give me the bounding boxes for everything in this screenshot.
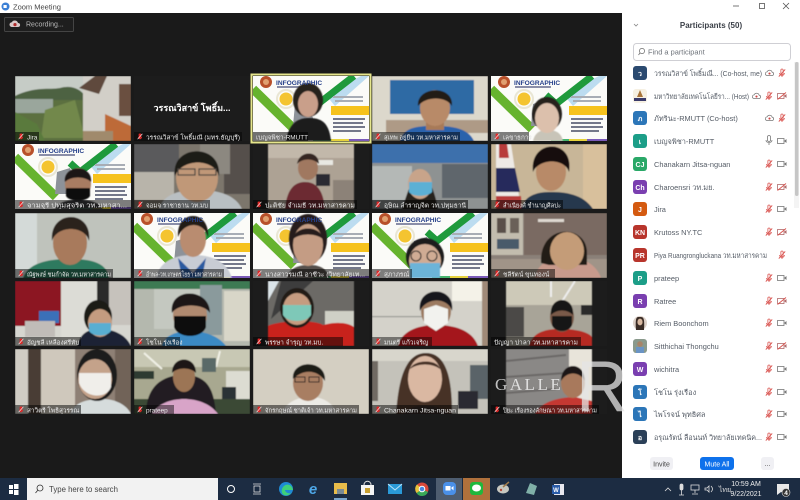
icon: paint	[497, 482, 509, 494]
participant row: Piya Ruangrongluckana วท.มหาสารคาม	[654, 251, 767, 260]
panel heading: Participants (50)	[680, 21, 742, 30]
participant row	[633, 180, 786, 194]
participant row: R	[637, 299, 643, 306]
participant row: Riem Boonchom	[654, 319, 709, 328]
name tag: โชโน รุ่งเรือง	[146, 338, 182, 346]
participant row: มหาวิทยาลัยเทคโนโลยีรา... (Host)	[654, 92, 749, 101]
slide heading: INFOGRAPHIC	[514, 80, 560, 87]
name tag: สาวิตรี โพธิสุวรรณ	[27, 406, 79, 414]
name tag: วรรณวิสาข์ โพธิ์มณี (มทร.ธัญบุรี)	[146, 132, 240, 141]
name tag: มนตรี แก้วเจริญ	[384, 338, 429, 346]
video tile: man in red, pillarboxed office	[491, 281, 607, 346]
participant row: ไ	[637, 410, 642, 419]
icon: chrome	[415, 482, 428, 496]
name tag: ปิยะ เรืองรองลักษณา วท.มหาสารคาม	[502, 406, 597, 414]
participant row	[633, 134, 786, 148]
participant row: P	[638, 276, 643, 283]
participant row: เ	[639, 139, 642, 146]
participant row: Sitthichai Thongchu	[654, 342, 719, 351]
name tag: Jira	[27, 134, 38, 141]
clock: 9/22/2021	[730, 491, 762, 498]
video tile: woman with white mask	[15, 349, 131, 414]
participant row	[633, 339, 786, 353]
participant row: โชโน รุ่งเรือง	[654, 388, 697, 397]
name tag: สำเนียงศ์ ชำนาญศิลปะ	[503, 201, 561, 209]
keyboard language: ไทย	[718, 485, 731, 494]
participant row	[633, 362, 786, 376]
system tray	[665, 484, 712, 495]
icon: cortana	[228, 486, 234, 492]
video tile: woman in car with teal mask	[253, 281, 369, 346]
video tile: man in blue shirt	[372, 76, 488, 141]
video tile: Jira	[15, 76, 131, 141]
participant row	[633, 89, 786, 103]
icon: task view	[253, 484, 261, 494]
name tag: เบญจพิชา-RMUTT	[256, 133, 308, 141]
participant row: Charoensri วท.มย.	[654, 183, 715, 192]
icon: store	[361, 481, 374, 495]
video tile: woman with slide	[253, 213, 369, 278]
name tag: สุภาภรณ์	[384, 270, 409, 278]
slide heading: INFOGRAPHIC	[276, 217, 322, 224]
search box	[634, 44, 790, 60]
slide heading: INFOGRAPHIC	[395, 217, 441, 224]
icon: app window	[526, 483, 537, 495]
recording badge: Recording...	[26, 22, 64, 28]
video tile: Chanakarn Jitsa-nguan	[372, 349, 488, 414]
participant row	[633, 225, 786, 239]
video tile: man with black mask and slide	[15, 144, 131, 209]
video tile: man with glasses	[134, 144, 250, 209]
name tag: เลขาธการ	[503, 134, 532, 141]
participant row: W	[637, 367, 644, 374]
video tile: man with black mask in office	[134, 281, 250, 346]
participant row: Ch	[635, 185, 645, 192]
video tile: man with white mask in red jacket	[372, 281, 488, 346]
participant row: wichitra	[653, 365, 680, 374]
participant row	[633, 294, 786, 308]
participant row	[633, 316, 786, 330]
clock: 10:59 AM	[731, 481, 761, 488]
notification badge: 4	[784, 490, 788, 497]
name tag: สุเทพ อยู่ยืน วท.มหาสารคาม	[384, 133, 458, 141]
participant row	[633, 248, 785, 262]
invite button	[650, 457, 673, 470]
participant row: PR	[635, 253, 645, 260]
video tile: man with glasses at light wall	[253, 349, 369, 414]
participant row: ภ	[638, 116, 643, 123]
collapse chevron	[634, 24, 638, 26]
notification badge	[777, 484, 790, 497]
icon: zoom logo	[2, 2, 10, 10]
more button	[761, 457, 774, 470]
name tag: ณัฐพงษ์ ชมกำจัด วท.มหาสารคาม	[27, 270, 111, 278]
participant row: Ratree	[654, 297, 676, 306]
participant row	[633, 271, 786, 285]
video tile: camera off name: วรรณวิสาข์ โพธิ์ม...	[153, 101, 231, 113]
video tile: woman in maroon, pillarboxed	[253, 144, 369, 209]
slide heading: INFOGRAPHIC	[276, 80, 322, 87]
video tile: woman in front of frames	[491, 213, 607, 278]
participant row: Krutoss NY.TC	[654, 228, 703, 237]
name tag: Chanakarn Jitsa-nguan	[384, 407, 456, 414]
icon: mail	[388, 484, 402, 494]
participant row	[633, 430, 786, 444]
icon: file explorer	[334, 483, 347, 500]
participant row	[633, 407, 786, 421]
search box	[27, 478, 218, 500]
name tag: ปัญญา ปาลา วท.มหาสารคาม	[494, 339, 578, 346]
participant row: prateep	[654, 274, 679, 283]
window controls	[733, 3, 789, 9]
watermark	[495, 347, 628, 427]
icon: zoom, active	[436, 478, 462, 500]
name tag: ปะติชัย จำเมธี วท.มหาสารคาม	[265, 201, 355, 209]
video tile: man at stone wall	[491, 349, 607, 414]
participant row: โ	[637, 388, 642, 397]
video tile: woman with glasses and slide	[372, 213, 488, 278]
name tag: อัญชลี เหลืองศรีทับ	[27, 338, 79, 346]
taskbar	[0, 478, 800, 500]
participant row: อ	[638, 435, 642, 442]
name tag: จักรกฤษณ์ ชาติเจ้า วท.มหาสารคาม	[265, 406, 357, 414]
icon: word: W	[553, 488, 559, 494]
participant row: J	[638, 207, 642, 214]
name tag: จามจุรี ปทุมสุจริต วท.มหาสา...	[27, 201, 127, 209]
participant row: KN	[635, 230, 645, 237]
participant row: เบญจพิชา-RMUTT	[654, 137, 715, 146]
more button: ...	[765, 461, 770, 468]
participant row: วรรณวิสาข์ โพธิ์มณี... (Co-host, me)	[654, 68, 762, 78]
watermark: R	[576, 347, 628, 427]
watermark: GALLE	[495, 375, 563, 394]
participant row: Jira	[654, 205, 667, 214]
mute all button: Mute All	[705, 462, 730, 468]
icon: edge	[279, 482, 293, 496]
name tag: prateep	[146, 407, 168, 414]
participant row: อรุณรัตน์ ลือนนท์ วิทยาลัยเทคนิค...	[654, 433, 762, 442]
participant row	[633, 202, 786, 216]
participant row	[633, 111, 785, 125]
video tile: woman with blue mask, red board	[15, 281, 131, 346]
participants panel	[622, 3, 800, 478]
participant row	[633, 385, 786, 399]
video tile: active speaker with slide	[252, 74, 370, 142]
search box: Type here to search	[49, 485, 118, 494]
video tile: man with slide	[134, 213, 250, 278]
invite button: Invite	[653, 462, 670, 468]
slide heading: INFOGRAPHIC	[157, 217, 203, 224]
search box: Find a participant	[648, 48, 705, 56]
recording badge	[4, 18, 74, 32]
participant row: ไพโรจน์ พุทธิศล	[653, 410, 705, 419]
participant row: CJ	[636, 162, 645, 169]
participant row: ว	[638, 71, 642, 78]
clock	[730, 481, 762, 498]
participant row: ภัทรินะ-RMUTT (Co-host)	[654, 114, 738, 123]
video tile: woman with slide	[491, 76, 607, 141]
icon: word	[552, 484, 564, 495]
video tile: woman with blue mask at shelves	[372, 144, 488, 209]
name tag: อุษิณ ลำราญจิต วท.ปทุมธานี	[384, 201, 467, 209]
icon: line, flashing	[463, 478, 490, 500]
name tag: พรรษา จำรุญ วท.มบ.	[265, 339, 323, 346]
participant row: Chanakarn Jitsa-nguan	[654, 160, 730, 169]
title bar	[0, 0, 800, 13]
video tile: camera off name	[134, 76, 250, 141]
name tag: นางสาวรมณี อาชีวะ (วิทยาลัยเท...	[265, 270, 365, 278]
name tag: จอมจ ราชาธาน วท.มบ	[146, 202, 208, 209]
icon: internet explorer: e	[309, 481, 317, 498]
video tile: prateep in pink shirt	[134, 349, 250, 414]
scrollbar	[794, 62, 799, 208]
mute all button	[700, 457, 734, 470]
participant row	[633, 66, 785, 80]
name tag: อำพล-วท.เกษตรโยธา มหาสารคาม	[146, 270, 222, 278]
window title: Zoom Meeting	[13, 2, 61, 12]
slide heading: INFOGRAPHIC	[38, 148, 84, 155]
video tile: man in green shirt	[15, 213, 131, 278]
participant row	[633, 157, 786, 171]
video tile: young man with Thai flag	[491, 144, 607, 209]
icon: windows start	[9, 484, 18, 495]
name tag: ชลีรัตน์ ขุนทองน์	[503, 270, 550, 278]
